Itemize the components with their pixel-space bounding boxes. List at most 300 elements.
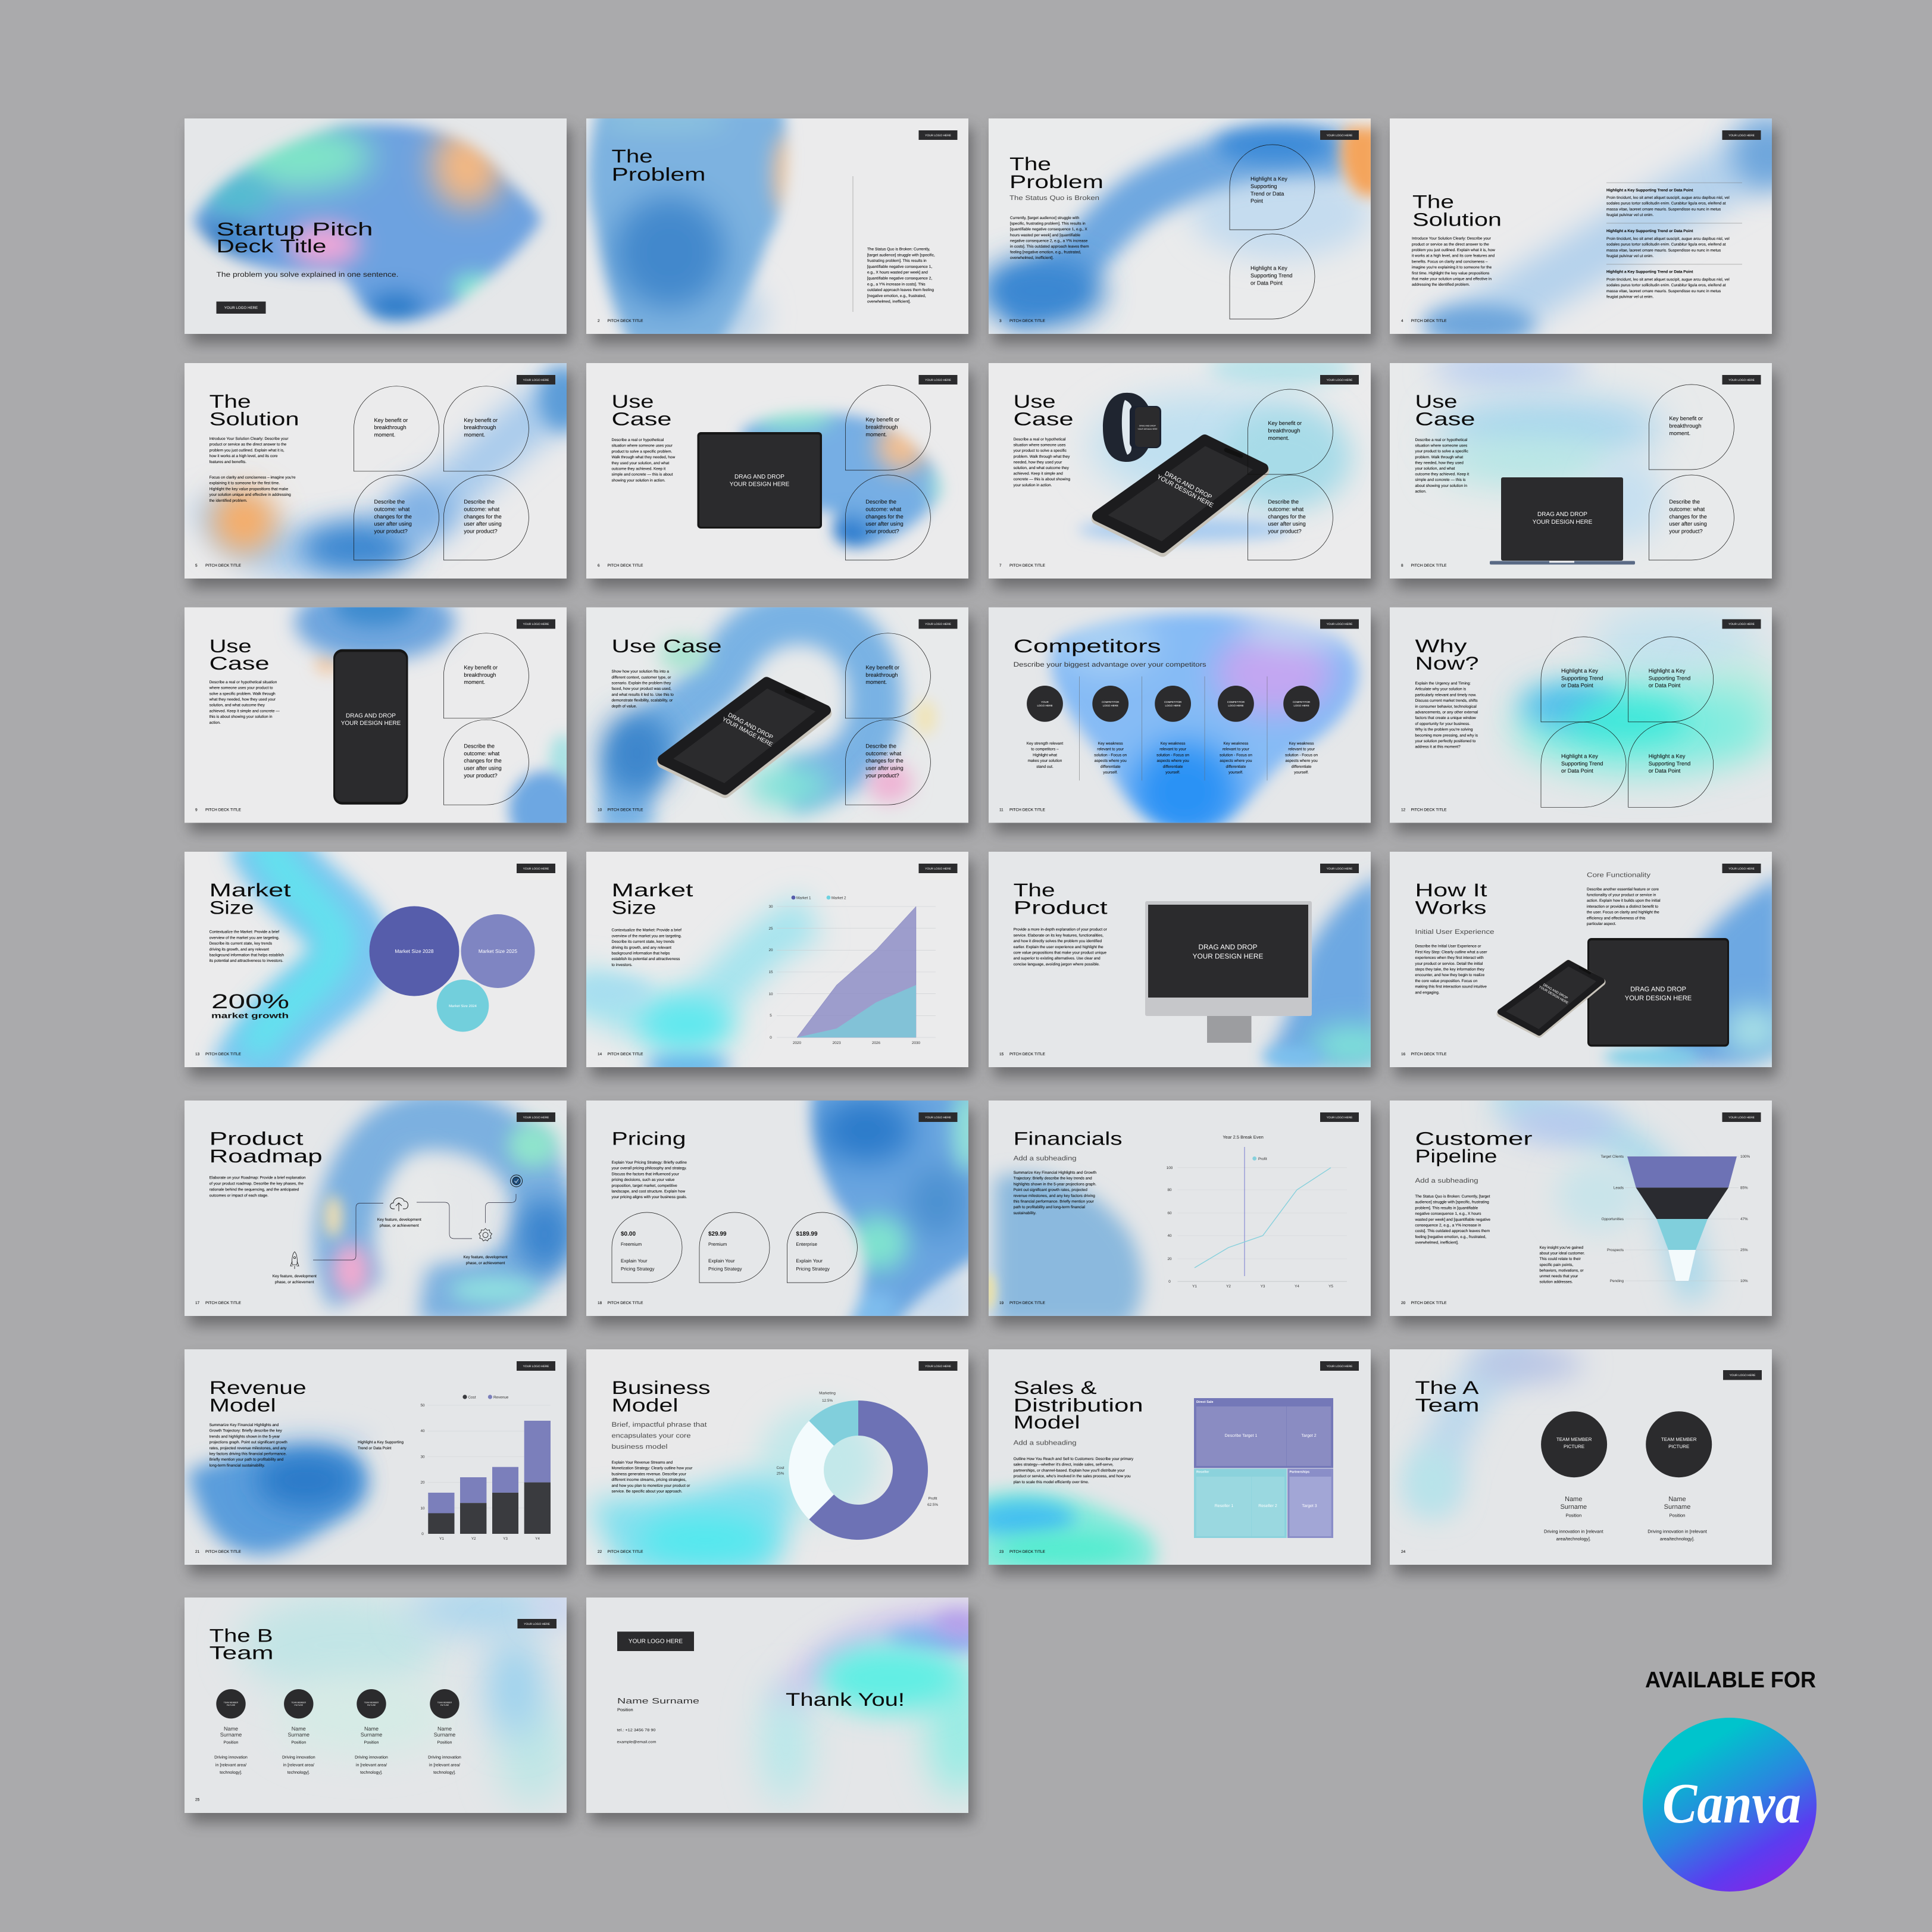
funnel chart: Prospects [1607, 1248, 1624, 1252]
petal card: outcome: what [865, 506, 902, 512]
body text: earlier. Explain the user experience and highlight the [1014, 945, 1103, 949]
area chart: 15 [768, 970, 773, 974]
petal card: Highlight a Key [1561, 753, 1598, 759]
body text: solve a specific problem. Walk through [210, 692, 276, 696]
gradient blob [244, 834, 354, 1078]
competitor column [1155, 686, 1191, 775]
logo box: YOUR LOGO HERE [523, 1365, 549, 1368]
donut chart: Marketing [819, 1392, 836, 1395]
body text: benefits. Focus on clarity and conciseness – [1412, 260, 1488, 264]
roadmap label: phase, or achievement [466, 1261, 505, 1265]
watch mockup [1103, 393, 1161, 462]
body text: becoming more pressing, and why is [1415, 733, 1478, 737]
logo box [517, 864, 555, 873]
petal card [443, 720, 529, 805]
phone mockup [333, 649, 408, 805]
title: Model [210, 1395, 276, 1416]
statistic: 200% [211, 990, 289, 1013]
subheading: business model [612, 1443, 668, 1450]
logo box: YOUR LOGO HERE [523, 1116, 549, 1120]
competitor column: solution - Focus on [1094, 753, 1127, 757]
petal card: Highlight a Key [1649, 753, 1686, 759]
gradient blob [1497, 1095, 1699, 1297]
icon: cloud upload [390, 1198, 408, 1211]
petal card: user after using [464, 521, 502, 527]
team member: Driving innovation [355, 1755, 388, 1760]
donut chart: 25% [777, 1472, 784, 1476]
logo box: YOUR LOGO HERE [925, 379, 951, 382]
body text: negative consequence 1, e.g., X hours [1415, 1212, 1481, 1216]
divider [852, 176, 854, 312]
body text: advancements, or any other external [1415, 711, 1478, 715]
petal card: Describe the [374, 499, 405, 505]
stacked bar chart: Y3 [503, 1537, 508, 1541]
logo box: YOUR LOGO HERE [925, 623, 951, 626]
stacked bar chart [420, 1395, 551, 1541]
title [1014, 880, 1108, 918]
footer: 14 [598, 1052, 602, 1056]
title [612, 391, 671, 430]
footer: 3 [999, 319, 1002, 323]
monitor mockup [1145, 901, 1312, 1043]
body text: what they needed, how they used your [209, 698, 276, 702]
contact details [617, 1728, 656, 1744]
title: Competitors [1014, 636, 1161, 656]
title [612, 1377, 711, 1416]
treemap: Direct Sale [1196, 1400, 1213, 1404]
logo box [1320, 130, 1359, 140]
petal card: Key benefit or [464, 417, 498, 423]
body text: First Key Step: Clearly outline what a user [1415, 950, 1487, 954]
page number: 25 [195, 1798, 200, 1802]
area chart: 2026 [872, 1041, 880, 1045]
body text: Contextualize the Market: Provide a brief [210, 930, 279, 934]
body text: this is about showing your solution in [210, 715, 273, 719]
title [1415, 391, 1475, 430]
petal card [1649, 475, 1734, 560]
bubble chart: Market Size 2025 [479, 948, 517, 954]
slide 13: Market Size circles [185, 834, 571, 1078]
competitor column: solution - Focus on [1285, 753, 1318, 757]
funnel chart: Target Clients [1601, 1155, 1624, 1159]
competitor column: solution - Focus on [1156, 753, 1189, 757]
gradient blob [1431, 352, 1664, 542]
petal card [1230, 145, 1315, 230]
body text: sales strategy—whether it's direct, inside sales, self-serve, [1014, 1463, 1114, 1467]
footer: PITCH DECK TITLE [607, 1301, 643, 1305]
footer: 11 [999, 808, 1003, 812]
body text: the core value proposition. Focus on [1415, 979, 1478, 983]
list item: Proin tincidunt, leo sit amet aliquet suscipit, augue arcu dapibus nisl, vel [1606, 196, 1730, 200]
line chart: Y3 [1261, 1284, 1265, 1289]
body text: overview of the market you are targeting. [612, 934, 681, 938]
body text: solution addresses. [1539, 1280, 1573, 1284]
stacked bar chart: Y1 [439, 1537, 444, 1541]
petal card: Supporting [1251, 183, 1277, 189]
title: The A [1415, 1377, 1479, 1398]
phone mockup: YOUR IMAGE HERE [721, 716, 774, 748]
team member: Driving innovation in [relevant [1647, 1529, 1708, 1534]
petal card [845, 385, 930, 470]
phone mockup: YOUR DESIGN HERE [341, 720, 401, 727]
title: Pipeline [1415, 1146, 1498, 1167]
title [210, 1128, 323, 1167]
petal card: moment. [464, 432, 485, 438]
body text: landscape, and cost structure. Explain how [612, 1189, 685, 1194]
body text: Summarize Key Financial Highlights and Growth [1014, 1171, 1096, 1175]
competitor column: COMPETITOR [1102, 701, 1119, 704]
stacked bar chart: 40 [420, 1429, 425, 1433]
petal card: Key benefit or [865, 417, 899, 423]
team member: Position [1565, 1513, 1581, 1518]
body text: your solution unique and effective in addressing [210, 493, 291, 497]
logo box: YOUR LOGO HERE [629, 1638, 683, 1645]
footer: PITCH DECK TITLE [205, 1052, 242, 1056]
footer: PITCH DECK TITLE [205, 808, 242, 812]
footer: 15 [999, 1052, 1004, 1056]
body text: that make your solution unique and effective in [1412, 277, 1492, 281]
stacked bar chart: 20 [420, 1481, 425, 1484]
body text: showing your solution in action. [612, 479, 665, 483]
tablet mockup [1587, 938, 1729, 1046]
competitor column: Key weakness [1161, 742, 1186, 746]
logo box: YOUR LOGO HERE [1327, 867, 1352, 871]
phone mockup: YOUR DESIGN HERE [1538, 985, 1569, 1005]
body text: Point out significant growth rates, projected [1014, 1188, 1087, 1192]
body text: simple and concrete — this is about [612, 473, 673, 477]
body text: overwhelmed, inefficient]. [867, 300, 911, 304]
footer: 4 [1401, 319, 1403, 323]
company column: to competitors – [1031, 748, 1059, 752]
title: Deck Title [217, 236, 326, 257]
slide 22: Business Model [586, 1349, 973, 1575]
competitor column: aspects where you [1156, 759, 1189, 763]
title [210, 391, 299, 430]
body text: its potential and attractiveness to investors. [210, 959, 283, 963]
funnel chart: 47% [1740, 1217, 1748, 1221]
body text: your product to solve a specific [1415, 449, 1468, 454]
tablet mockup: DRAG AND DROP [1630, 986, 1686, 993]
logo box: YOUR LOGO HERE [925, 134, 951, 137]
team member: in [relevant area/ [429, 1763, 460, 1768]
gradient blob [295, 583, 580, 848]
body text: situation where someone uses [1415, 444, 1468, 448]
phone mockup [1500, 963, 1602, 1034]
gradient blob [211, 366, 586, 573]
footer: 16 [1401, 1052, 1406, 1056]
petal card: Supporting Trend [1561, 675, 1603, 681]
body text: product or service as the direct answer to the [1412, 242, 1489, 246]
competitor column [1092, 686, 1128, 775]
body text: audience] struggle with [specific, frustrating [1415, 1201, 1489, 1205]
competitor column [1283, 686, 1320, 775]
phone mockup: DRAG AND DROP [1542, 983, 1568, 1001]
slide 4: The Solution list [1390, 118, 1803, 345]
petal card: Describe the [1268, 499, 1299, 505]
petal card [354, 475, 439, 560]
company column: makes your solution [1028, 759, 1062, 763]
title: Size [612, 898, 656, 918]
competitor column: LOGO HERE [1228, 704, 1244, 707]
logo box [517, 619, 555, 629]
icon: gear [479, 1228, 492, 1241]
competitor column: Key weakness [1223, 742, 1249, 746]
team member: TEAM MEMBER [1661, 1437, 1697, 1442]
petal card: user after using [1669, 521, 1707, 527]
gradient blob [238, 1586, 580, 1806]
list item: Highlight a Key Supporting Trend or Data Point [1606, 270, 1693, 274]
body text: unmet needs that your [1539, 1274, 1578, 1278]
body text: path to profitability and long-term financial [1014, 1205, 1085, 1209]
subheading: Core Functionality [1587, 871, 1651, 879]
footer: PITCH DECK TITLE [1411, 1301, 1447, 1305]
title: Use [1415, 391, 1457, 412]
petal card: Trend or Data [1251, 190, 1284, 196]
callout: Highlight a Key Supporting [358, 1440, 404, 1445]
slide 10: Use Case angled phone [586, 607, 973, 833]
team member: technology]. [287, 1770, 310, 1775]
team member: Driving innovation in [relevant [1544, 1529, 1603, 1534]
body text: problem you just outlined. Explain what it is, [210, 448, 285, 452]
competitor column: yourself. [1228, 771, 1243, 775]
line chart: Y2 [1226, 1284, 1231, 1289]
team member: Position [1670, 1513, 1685, 1518]
body text: and how it directly solves the problem you identified [1014, 939, 1102, 943]
body text: Articulate why your solution is [1415, 687, 1467, 692]
list item: massa vitae, laoreet ornare mauris. Suspendisse eu nunc in metus [1606, 248, 1721, 252]
laptop mockup [1490, 477, 1635, 564]
pricing card: Freemium [621, 1242, 642, 1247]
petal card [443, 386, 529, 471]
title: Use [1014, 391, 1056, 412]
team member: technology]. [360, 1770, 383, 1775]
body text: pricing decisions, such as your value [612, 1178, 675, 1182]
logo box [919, 375, 957, 384]
treemap: Partnerships [1289, 1471, 1309, 1474]
logo box [1722, 375, 1761, 384]
petal card [1248, 389, 1333, 474]
petal card: changes for the [865, 758, 904, 764]
body text: Key insight you've gained [1539, 1246, 1583, 1250]
footer: PITCH DECK TITLE [607, 1052, 643, 1056]
team member: TEAM MEMBER [224, 1701, 239, 1703]
body text: sustainability. [1014, 1211, 1036, 1215]
logo box: YOUR LOGO HERE [1327, 379, 1352, 382]
body text: [specific, frustrating problem]. This results in [1010, 222, 1086, 226]
area chart: 2020 [793, 1041, 801, 1045]
tablet mockup: DRAG AND DROP [734, 474, 784, 480]
footer: PITCH DECK TITLE [607, 564, 643, 568]
area chart [768, 905, 936, 1045]
body text: product to solve a specific problem. [612, 449, 673, 454]
title: Revenue [210, 1377, 307, 1398]
subheading: Add a subheading [1014, 1440, 1077, 1447]
competitor column: COMPETITOR [1227, 701, 1245, 704]
team member: Surname [1560, 1503, 1587, 1511]
logo box: YOUR LOGO HERE [1327, 623, 1352, 626]
title [1415, 1377, 1480, 1416]
petal card: user after using [464, 765, 502, 771]
petal card: breakthrough [1669, 423, 1702, 429]
subheading: encapsulates your core [612, 1432, 690, 1439]
body text: in consumer behavior, technological [1415, 705, 1477, 709]
pricing card: Pricing Strategy [796, 1267, 830, 1272]
petal card: user after using [865, 521, 904, 527]
body text: The Status Quo is Broken: Currently, [target [1415, 1195, 1490, 1199]
competitor column: aspects where you [1095, 759, 1127, 763]
body text: rates, projected revenue milestones, and any [210, 1446, 287, 1450]
title: Distribution [1014, 1395, 1143, 1416]
title [210, 880, 291, 918]
funnel chart [1601, 1155, 1750, 1283]
watch mockup: DRAG AND DROP [1139, 425, 1156, 427]
treemap [1194, 1398, 1333, 1538]
body text: outcome they achieved. Keep it [1415, 473, 1469, 477]
legend: Market 2 [831, 896, 846, 900]
body text: features and benefits. [210, 460, 246, 464]
team member: PICTURE [227, 1704, 236, 1706]
available for heading: AVAILABLE FOR [1645, 1668, 1816, 1693]
legend [792, 896, 846, 900]
footer: PITCH DECK TITLE [205, 1301, 242, 1305]
title: Team [1415, 1395, 1480, 1416]
company column: YOUR [1041, 701, 1049, 704]
petal card: breakthrough [865, 424, 898, 430]
team member: Position [291, 1740, 306, 1745]
legend: Market 1 [796, 896, 811, 900]
logo box [919, 864, 957, 873]
logo box [1723, 1370, 1762, 1380]
page number: 24 [1401, 1550, 1406, 1554]
title: Customer [1415, 1128, 1532, 1149]
gradient blob [741, 404, 956, 554]
petal card: user after using [1268, 521, 1306, 527]
petal card: user after using [865, 765, 904, 771]
phone mockup [663, 682, 826, 792]
body text: driving its growth, and any relevant [612, 946, 671, 950]
roadmap label: Key feature, development [464, 1255, 508, 1259]
petal card: moment. [865, 432, 887, 437]
competitor column: LOGO HERE [1103, 704, 1118, 707]
body text: situation where someone uses [1014, 443, 1066, 448]
donut chart: 12.5% [822, 1399, 833, 1403]
petal card: changes for the [1669, 514, 1707, 520]
team member: Surname [220, 1732, 242, 1738]
slide 17: Product Roadmap [185, 1101, 573, 1325]
petal card [1541, 637, 1626, 722]
petal card: or Data Point [1251, 280, 1283, 286]
body text: your pricing aligns with your business goals. [612, 1195, 687, 1199]
donut chart: Profit [929, 1496, 937, 1501]
footer: PITCH DECK TITLE [607, 808, 643, 812]
body text: demonstrate flexibility, scalability, or [612, 699, 673, 703]
body text: long-term financial sustainability. [210, 1464, 265, 1468]
body text: achieved. Keep it simple and concrete — [210, 709, 280, 713]
title: Case [1014, 409, 1074, 430]
stacked bar chart: Revenue [493, 1395, 509, 1400]
slide 1: title slide [185, 118, 571, 343]
body text: overview of the market you are targeting. [210, 936, 280, 940]
title: Use [210, 636, 252, 656]
petal card [443, 475, 529, 560]
footer: PITCH DECK TITLE [1009, 564, 1046, 568]
petal card: or Data Point [1649, 683, 1681, 689]
logo box [1320, 375, 1359, 384]
line chart: Year 2.5 Break Even [1223, 1134, 1264, 1140]
title: Now? [1415, 653, 1478, 674]
slide 7: Use Case watch and phone [989, 351, 1375, 588]
roadmap label: Key feature, development [377, 1218, 421, 1222]
petal card: breakthrough [464, 672, 496, 678]
body text: e.g., a Y% increase in costs]. This [867, 282, 926, 286]
statistic [211, 990, 289, 1020]
funnel chart: Opportunities [1602, 1217, 1624, 1221]
petal card [845, 475, 930, 560]
bubble chart: Market Size 2028 [395, 948, 434, 954]
team member [1541, 1411, 1607, 1542]
body text: [quantifiable negative consequence 1, e.g., X [1010, 227, 1087, 232]
body text: This could relate to their [1539, 1257, 1581, 1261]
stacked bar chart: 10 [420, 1506, 425, 1511]
pricing card: Explain Your [796, 1258, 823, 1264]
body text: situation where someone uses your [612, 444, 673, 448]
team member: Surname [288, 1732, 310, 1738]
petal card: Key benefit or [1268, 420, 1302, 426]
body text: making this first interaction sound intuitive [1415, 985, 1487, 989]
callout: Trend or Data Point [358, 1446, 392, 1450]
donut chart [777, 1392, 938, 1540]
body text: Provide a more in-depth explanation of your product or [1014, 928, 1108, 932]
footer: PITCH DECK TITLE [205, 564, 242, 568]
body text: outdated approach leaves them feeling [867, 288, 934, 292]
title [1009, 154, 1103, 192]
subtitle: The problem you solve explained in one sentence. [217, 270, 399, 279]
body text: Describe the Initial User Experience or [1415, 945, 1481, 949]
pricing card: Enterprise [796, 1242, 817, 1247]
body text: Growth Trajectory: Briefly describe the key [210, 1429, 282, 1433]
team member: Name [437, 1726, 452, 1732]
funnel chart: Leads [1614, 1186, 1624, 1190]
gradient blob [324, 1121, 573, 1303]
body text: proposition, target market, competitive [612, 1184, 677, 1188]
pricing card: Explain Your [708, 1258, 735, 1264]
title [210, 1377, 307, 1416]
logo box [1722, 864, 1761, 873]
petal card: Key benefit or [374, 417, 408, 423]
footer: PITCH DECK TITLE [1009, 1301, 1046, 1305]
list item: Highlight a Key Supporting Trend or Data Point [1606, 229, 1693, 233]
body text: problem. Walk through what [1415, 455, 1463, 459]
petal card [1649, 384, 1734, 470]
body text: problem]. This results in [quantifiable [1415, 1206, 1478, 1210]
body text: Show how your solution fits into a [612, 670, 669, 674]
team member [355, 1689, 388, 1775]
area chart: 0 [770, 1036, 772, 1040]
petal card: changes for the [464, 514, 502, 520]
team member: Position [364, 1740, 379, 1745]
body text: Discuss current market trends, shifts [1415, 699, 1478, 703]
logo box [919, 1361, 957, 1371]
thank you heading: Thank You! [786, 1689, 905, 1710]
title [1412, 192, 1502, 230]
list item: feugiat pulvinar vel ut enim. [1606, 295, 1653, 299]
body text: Describe a real or hypothetical situation [210, 680, 277, 684]
title: Product [1014, 898, 1108, 918]
body text: scenario. Explain the problem they [612, 681, 671, 686]
team member [428, 1689, 461, 1775]
logo box [617, 1631, 694, 1651]
logo box [517, 375, 555, 384]
